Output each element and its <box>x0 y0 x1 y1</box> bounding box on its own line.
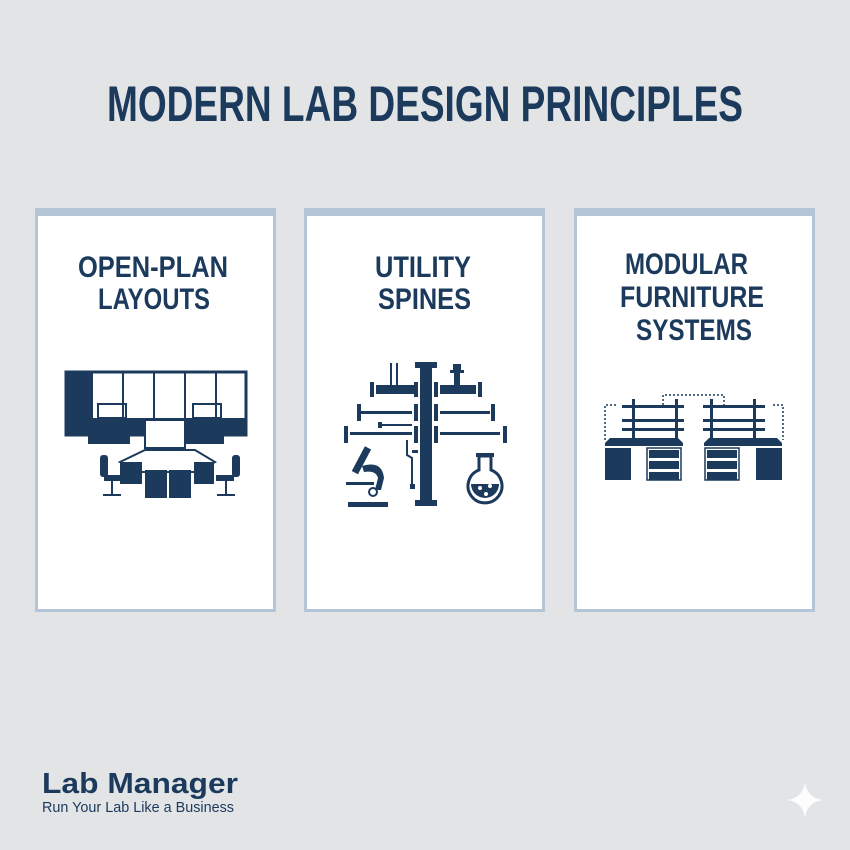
logo: Lab Manager: Run Your Lab Like a Business <box>42 799 234 816</box>
heading: modular furniture systems: SYSTEMS <box>636 314 752 347</box>
icon: open-plan lab <box>66 372 246 498</box>
heading: utility spines: SPINES <box>378 283 471 316</box>
heading: modular furniture systems: MODULAR <box>625 248 748 281</box>
panel: open-plan layouts <box>35 208 276 610</box>
heading: open-plan layouts: OPEN-PLAN <box>78 251 228 284</box>
icon: modular benches <box>605 395 783 480</box>
panel: utility spines <box>304 208 545 610</box>
heading: utility spines: UTILITY <box>375 251 471 284</box>
heading: open-plan layouts: LAYOUTS <box>98 283 210 316</box>
logo: Lab Manager: Lab Manager <box>42 768 238 800</box>
heading: modular furniture systems: FURNITURE <box>620 281 764 314</box>
microscope <box>352 446 371 474</box>
flask <box>468 456 502 503</box>
heading: open-plan layouts <box>78 251 228 316</box>
icon: utility spine with microscope and flask <box>344 362 507 507</box>
logo: Lab Manager <box>42 768 238 816</box>
heading: utility spines <box>375 251 471 316</box>
heading: modular furniture systems <box>620 248 764 347</box>
icon: sparkle <box>787 782 823 818</box>
panel: modular furniture systems <box>574 208 815 610</box>
